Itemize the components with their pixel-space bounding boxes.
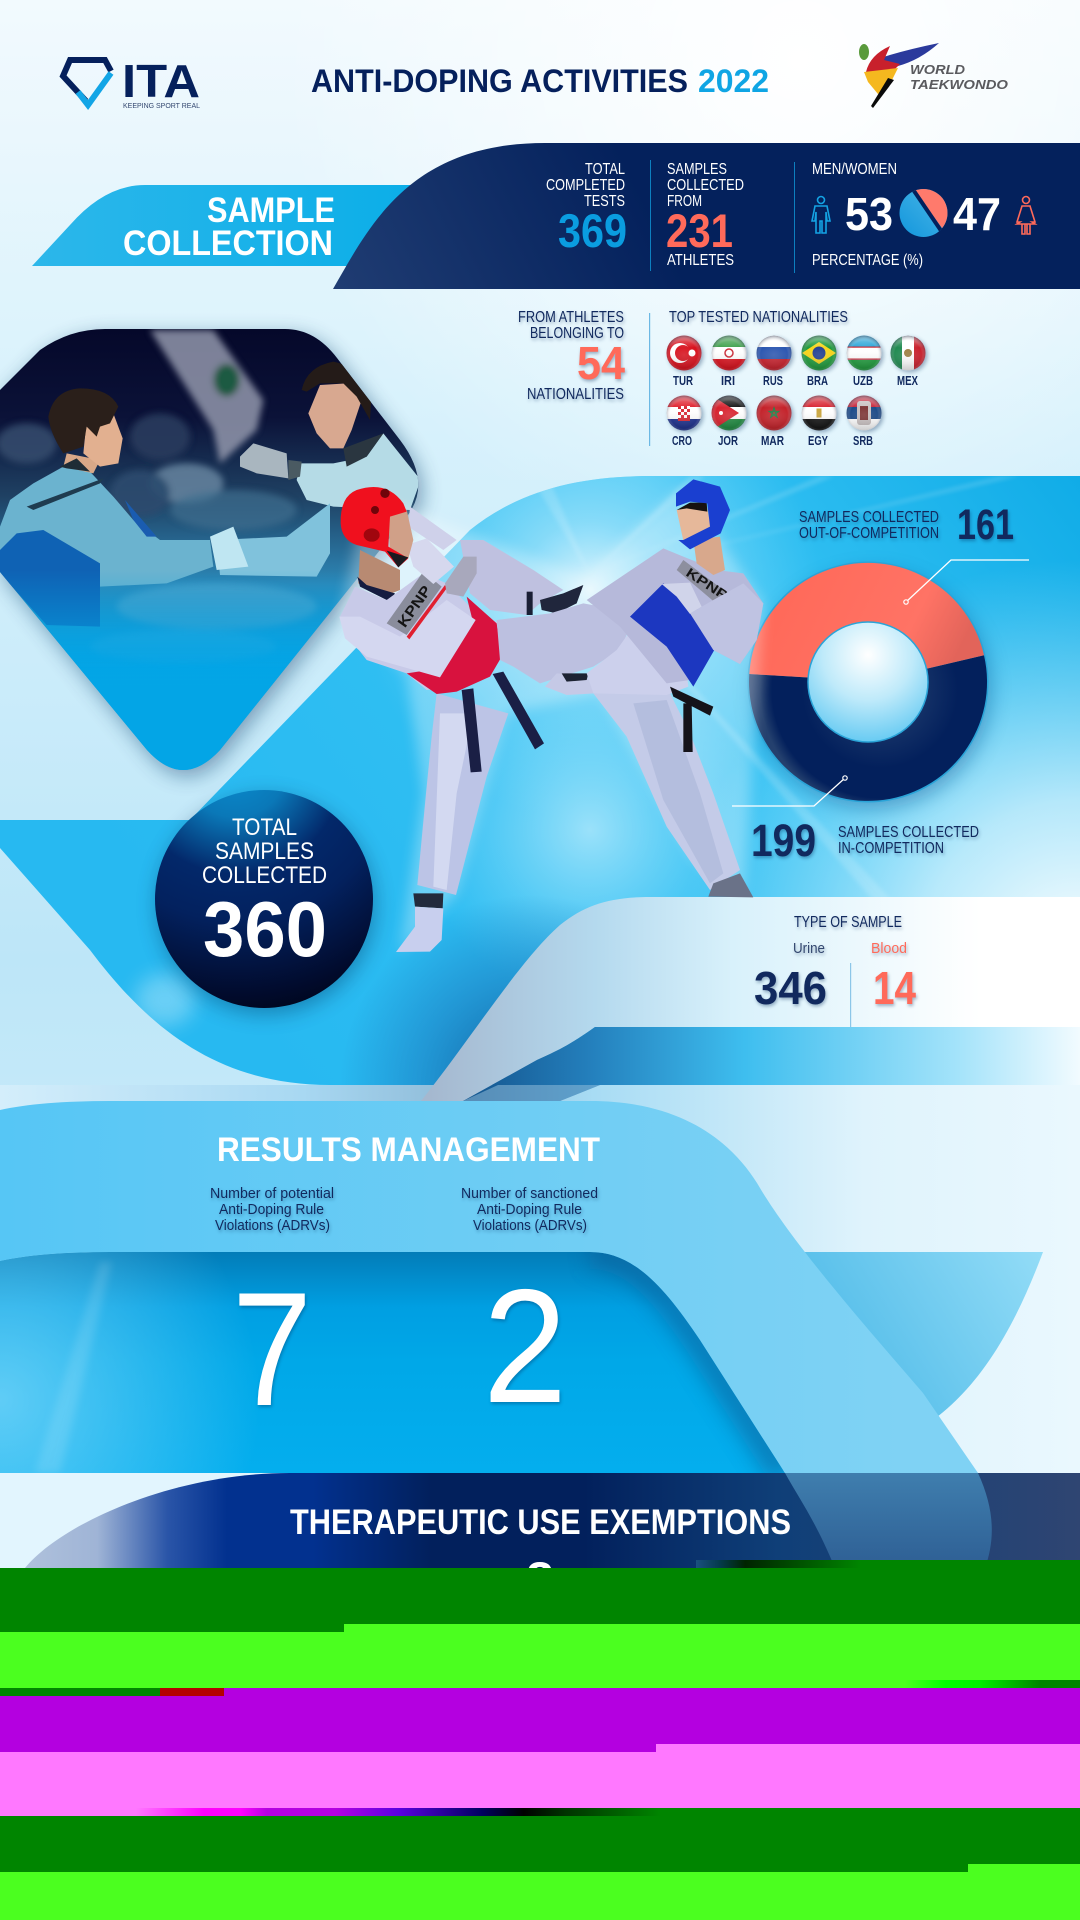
- left athlete: [0, 388, 248, 627]
- flag labels: MAR: [761, 434, 784, 448]
- neck: [693, 537, 725, 575]
- fighter: red: [339, 487, 632, 952]
- halo: [340, 487, 763, 953]
- panel: type of sample: 346: [754, 962, 827, 1014]
- panel: therapeutic use exemptions: APPROVED: [876, 1556, 943, 1573]
- stat: samples from athletes: 231: [666, 204, 733, 257]
- nationalities count: NATIONALITIES: [527, 386, 624, 403]
- total samples collected circle: COLLECTED: [202, 862, 327, 889]
- stat: total completed tests: 369: [558, 204, 627, 257]
- icon: woman: [1017, 196, 1035, 234]
- total samples collected circle: 360: [203, 885, 327, 973]
- flag labels: MEX: [897, 374, 919, 388]
- flag: Russia: [756, 335, 792, 371]
- nationalities count: FROM ATHLETES: [518, 309, 624, 326]
- panel: type of sample: TYPE OF SAMPLE: [794, 914, 902, 931]
- logo: World Taekwondo: WORLD: [910, 62, 966, 77]
- belt: [670, 687, 713, 716]
- panel: type of sample: Blood: [871, 940, 907, 957]
- rear sleeve: [460, 540, 563, 615]
- nationalities count: 54: [577, 337, 625, 389]
- label: out-of-competition: SAMPLES COLLECTED: [799, 509, 939, 526]
- panel: top tested nationalities: [666, 309, 928, 448]
- lower triangle background: [0, 1252, 1043, 1473]
- stat: men women percentage: 47: [953, 188, 1001, 240]
- heading tab: sample collection: COLLECTION: [123, 224, 333, 263]
- face: [388, 510, 413, 558]
- logo: ITA: KEEPING SPORT REAL: [123, 101, 200, 110]
- flag: Morocco: [756, 395, 792, 431]
- total samples collected circle: [155, 790, 375, 1014]
- corrupted image bands at bottom: [0, 1560, 1080, 1920]
- flag shadows: [668, 338, 928, 432]
- flag: Croatia: [666, 395, 702, 431]
- segment: in-competition: [749, 655, 987, 801]
- panel: sample collection stats: [333, 143, 1080, 289]
- black glove: [540, 585, 583, 613]
- panel: top tested nationalities: TOP TESTED NATIONALITIES: [669, 309, 848, 326]
- flag labels: UZB: [853, 374, 873, 388]
- flag labels: SRB: [853, 434, 873, 448]
- label: in-competition: SAMPLES COLLECTED: [838, 824, 979, 841]
- fighter: blue: [545, 479, 763, 897]
- flag: Iran: [711, 335, 747, 371]
- label: out-of-competition: [799, 501, 1014, 549]
- logo: ITA: ITA: [122, 55, 200, 107]
- kicking leg: [587, 627, 688, 695]
- flag: Brazil: [801, 335, 837, 371]
- label: out-of-competition: OUT-OF-COMPETITION: [799, 525, 939, 542]
- callout line: in-competition: [732, 776, 847, 806]
- crowd blur: [0, 330, 317, 663]
- panel: type of sample: 14: [873, 962, 916, 1014]
- stat: samples from athletes: FROM: [667, 193, 702, 210]
- flag labels: IRI: [721, 374, 735, 388]
- donut centre: [808, 622, 928, 742]
- face: [677, 505, 711, 541]
- flag: Egypt: [801, 395, 837, 431]
- logo: ITA: [63, 55, 200, 110]
- label: potential ADRVs: Anti-Doping Rule: [219, 1201, 324, 1218]
- flag labels: CRO: [672, 434, 692, 448]
- chest protector: [630, 583, 714, 687]
- flag labels: [672, 374, 919, 448]
- stat: total completed tests: COMPLETED: [546, 177, 625, 194]
- label: in-competition: 199: [751, 815, 816, 866]
- flag labels: JOR: [718, 434, 738, 448]
- flag: Jordan: [711, 395, 747, 431]
- arm: [339, 600, 476, 677]
- chart: donut samples collected: [732, 501, 1029, 866]
- main blue background shape: [0, 476, 1080, 1086]
- torso: [340, 573, 500, 690]
- label: potential ADRVs: Violations (ADRVs): [215, 1217, 330, 1234]
- panel: therapeutic use exemptions: 6: [851, 1534, 879, 1590]
- stat: men women percentage: PERCENTAGE (%): [812, 252, 923, 269]
- standing leg: [593, 687, 740, 890]
- heading tab: sample collection: [32, 185, 420, 266]
- icon: man: [812, 196, 830, 233]
- chest protector: [407, 597, 502, 694]
- nationalities count: [518, 309, 625, 403]
- stat: samples from athletes: [666, 161, 744, 269]
- label: sanctioned ADRVs: Violations (ADRVs): [473, 1217, 587, 1234]
- flag: Turkey: [666, 335, 702, 371]
- stat: total completed tests: [546, 161, 627, 257]
- panel: results management: 2: [483, 1256, 567, 1437]
- flag labels: RUS: [763, 374, 783, 388]
- stat: men women percentage: [812, 161, 1035, 269]
- stat: men women percentage: 53: [845, 188, 893, 240]
- arm: [690, 583, 763, 664]
- light overlay band: [0, 1101, 978, 1473]
- flag labels: TUR: [673, 374, 693, 388]
- label: potential ADRVs: Number of potential: [210, 1185, 334, 1202]
- total samples collected circle: SAMPLES: [215, 838, 314, 865]
- label: potential ADRVs: [210, 1185, 334, 1234]
- panel: therapeutic use exemptions: THERAPEUTIC USE EXEMPTIONS: [290, 1503, 791, 1542]
- torso: [587, 548, 763, 683]
- neck and collar: [358, 550, 400, 597]
- illustration: two taekwondo fighters: [339, 479, 763, 953]
- callout line: out-of-competition: [904, 560, 1029, 604]
- panel: results management: [0, 1101, 1043, 1568]
- sponsor strip: [387, 572, 442, 635]
- stat: samples from athletes: SAMPLES: [667, 161, 727, 178]
- fighter: blue: KPNP: [683, 565, 731, 603]
- glove: [662, 583, 702, 614]
- flag: Serbia: [846, 395, 882, 431]
- label: out-of-competition: 161: [957, 501, 1014, 549]
- segment: out-of-competition: [749, 563, 984, 678]
- label: sanctioned ADRVs: Anti-Doping Rule: [477, 1201, 582, 1218]
- photo: athletes in diamond: [0, 320, 440, 780]
- title: ANTI-DOPING ACTIVITIES: [311, 63, 688, 99]
- label: in-competition: IN-COMPETITION: [838, 840, 944, 857]
- title: 2022: [698, 63, 769, 99]
- flag labels: BRA: [807, 374, 828, 388]
- right athlete: [217, 362, 421, 577]
- sponsor strip: [677, 560, 732, 612]
- nationalities count: BELONGING TO: [530, 325, 624, 342]
- panel: results management: RESULTS MANAGEMENT: [217, 1131, 600, 1169]
- label: sanctioned ADRVs: Number of sanctioned: [461, 1185, 598, 1202]
- flag: Mexico: [890, 335, 926, 371]
- panel: results management: 7: [232, 1259, 312, 1440]
- total samples collected circle: TOTAL: [232, 814, 297, 841]
- kicking leg: [497, 603, 632, 683]
- flag: Uzbekistan: [846, 335, 882, 372]
- panel: therapeutic use exemptions: [25, 1473, 1080, 1608]
- stat: men women percentage: MEN/WOMEN: [812, 161, 897, 178]
- logo: World Taekwondo: [859, 43, 1008, 108]
- belt: [462, 688, 482, 772]
- chart: men women pie: [900, 189, 948, 237]
- kicking foot: [545, 673, 595, 695]
- stat: samples from athletes: COLLECTED: [667, 177, 744, 194]
- panel: therapeutic use exemptions: 8: [526, 1552, 554, 1608]
- core panel: [0, 1252, 800, 1474]
- helmet: [676, 479, 730, 549]
- flag labels: EGY: [808, 434, 828, 448]
- stat: samples from athletes: ATHLETES: [667, 252, 734, 269]
- standing leg: [417, 693, 508, 895]
- panel: type of sample: [421, 897, 1080, 1101]
- stat: total completed tests: TOTAL: [585, 161, 625, 178]
- panel: type of sample: Urine: [793, 940, 825, 957]
- raised gloves: [408, 507, 457, 550]
- logo: World Taekwondo: TAEKWONDO: [910, 77, 1008, 92]
- fighter: red: KPNP: [395, 583, 435, 631]
- label: sanctioned ADRVs: [461, 1185, 598, 1234]
- stat: total completed tests: TESTS: [584, 193, 625, 210]
- label: in-competition: [751, 815, 979, 866]
- heading tab: sample collection: SAMPLE: [207, 191, 335, 230]
- helmet: [341, 487, 408, 567]
